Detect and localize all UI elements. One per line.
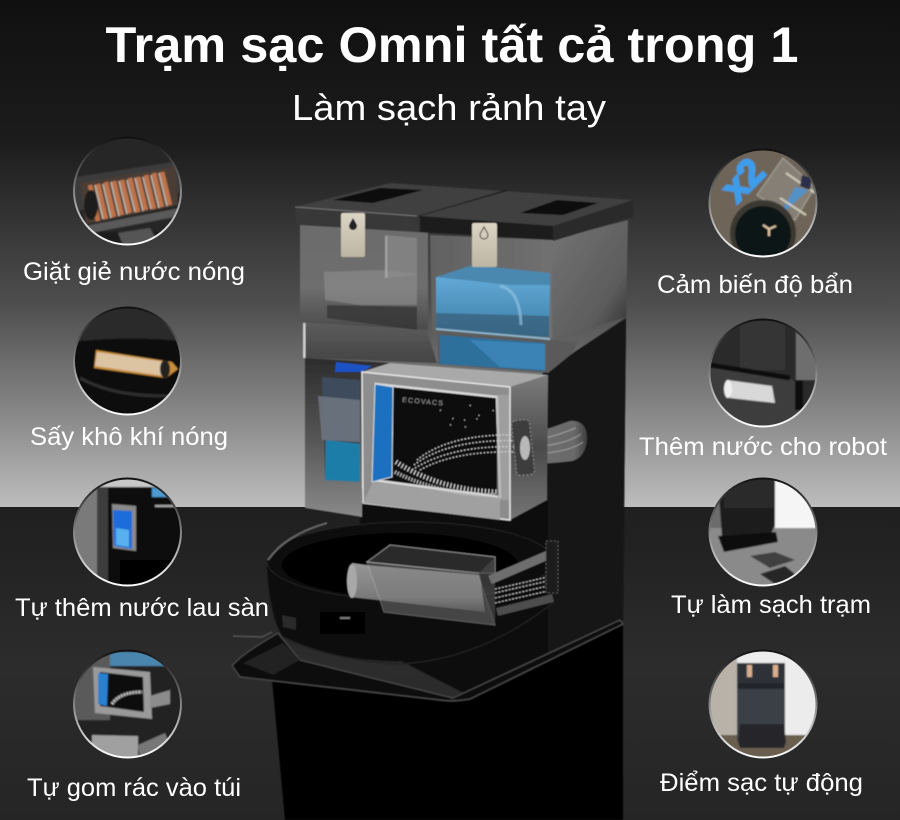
duct connector flange [511, 419, 535, 476]
feature: Tự thêm nước lau sàn [15, 478, 269, 622]
right tank latch with drop [472, 223, 497, 267]
lid handle left [333, 188, 423, 203]
duct hub [520, 436, 530, 460]
label: Sấy khô khí nóng [30, 423, 228, 451]
label: Điểm sạc tự động [660, 769, 863, 797]
right grey side panel [552, 220, 628, 339]
ring [710, 150, 816, 256]
mop dust stream [495, 576, 552, 603]
dock plate [232, 620, 623, 701]
ring [710, 650, 816, 758]
box lower inner ledge [363, 482, 500, 520]
lid handle right [520, 200, 598, 215]
subtitle: Làm sạch rảnh tay [292, 87, 606, 128]
ring [74, 650, 181, 758]
background floor [0, 507, 900, 820]
transparent dust box [362, 363, 548, 520]
robot front panel [282, 615, 296, 630]
ring [710, 478, 816, 586]
station lid [295, 183, 633, 241]
middle right blue tray [438, 333, 577, 373]
dust air stream [412, 435, 520, 470]
icon: charging dock [710, 652, 816, 756]
label: Tự thêm nước lau sàn [15, 594, 269, 622]
icon: dirt sensor robot [710, 150, 816, 256]
label: Tự gom rác vào túi [27, 774, 241, 802]
label: Thêm nước cho robot [639, 433, 887, 461]
ring [710, 320, 816, 426]
station dark body [360, 318, 626, 696]
upper air duct [523, 421, 587, 464]
illustration: Omni station [232, 183, 633, 820]
feature: Cảm biến độ bẩn [657, 145, 853, 299]
ring [74, 138, 181, 244]
label: Tự làm sạch trạm [671, 591, 871, 619]
left tank latch with drop [341, 213, 365, 257]
icon: hot wash coil [75, 138, 180, 244]
feature: Điểm sạc tự động [660, 650, 863, 797]
scattered dust [440, 405, 495, 430]
x2 mark: x2 [714, 151, 773, 210]
station reflection and dark base [272, 624, 623, 820]
ring [74, 308, 181, 414]
left dirty water tank [300, 225, 428, 330]
background wall gradient [0, 0, 900, 507]
feature: Giặt giẻ nước nóng [23, 135, 245, 286]
mop connector [546, 541, 558, 593]
label: Cảm biến độ bẩn [657, 271, 853, 299]
title: Trạm sạc Omni tất cả trong 1 [106, 17, 798, 73]
robot vacuum [233, 522, 553, 664]
brand label: ECOVACS [402, 397, 444, 408]
mop roller and transparent tray [347, 541, 558, 625]
feature: Thêm nước cho robot [639, 315, 887, 461]
vertical inner post [497, 395, 509, 500]
icon: robot water refill [710, 320, 815, 426]
icon: hot air drying roller [75, 308, 180, 414]
robot wire [233, 632, 272, 637]
inner black cavity [373, 384, 500, 497]
middle left tray [304, 323, 437, 363]
feature: Tự làm sạch trạm [671, 478, 871, 619]
feature: Tự gom rác vào túi [27, 650, 241, 802]
icon: station self-cleaning [710, 480, 816, 584]
label: Giặt giẻ nước nóng [23, 258, 245, 286]
ring [74, 478, 181, 586]
dust particles [396, 462, 497, 492]
blue filter inside the box [372, 384, 393, 482]
icon: water refill [75, 480, 180, 584]
icon: dust collection [75, 652, 180, 756]
feature: Sấy khô khí nóng [30, 305, 228, 451]
lower left grey housing with blue filter [305, 358, 390, 517]
right clean water tank [430, 235, 552, 339]
